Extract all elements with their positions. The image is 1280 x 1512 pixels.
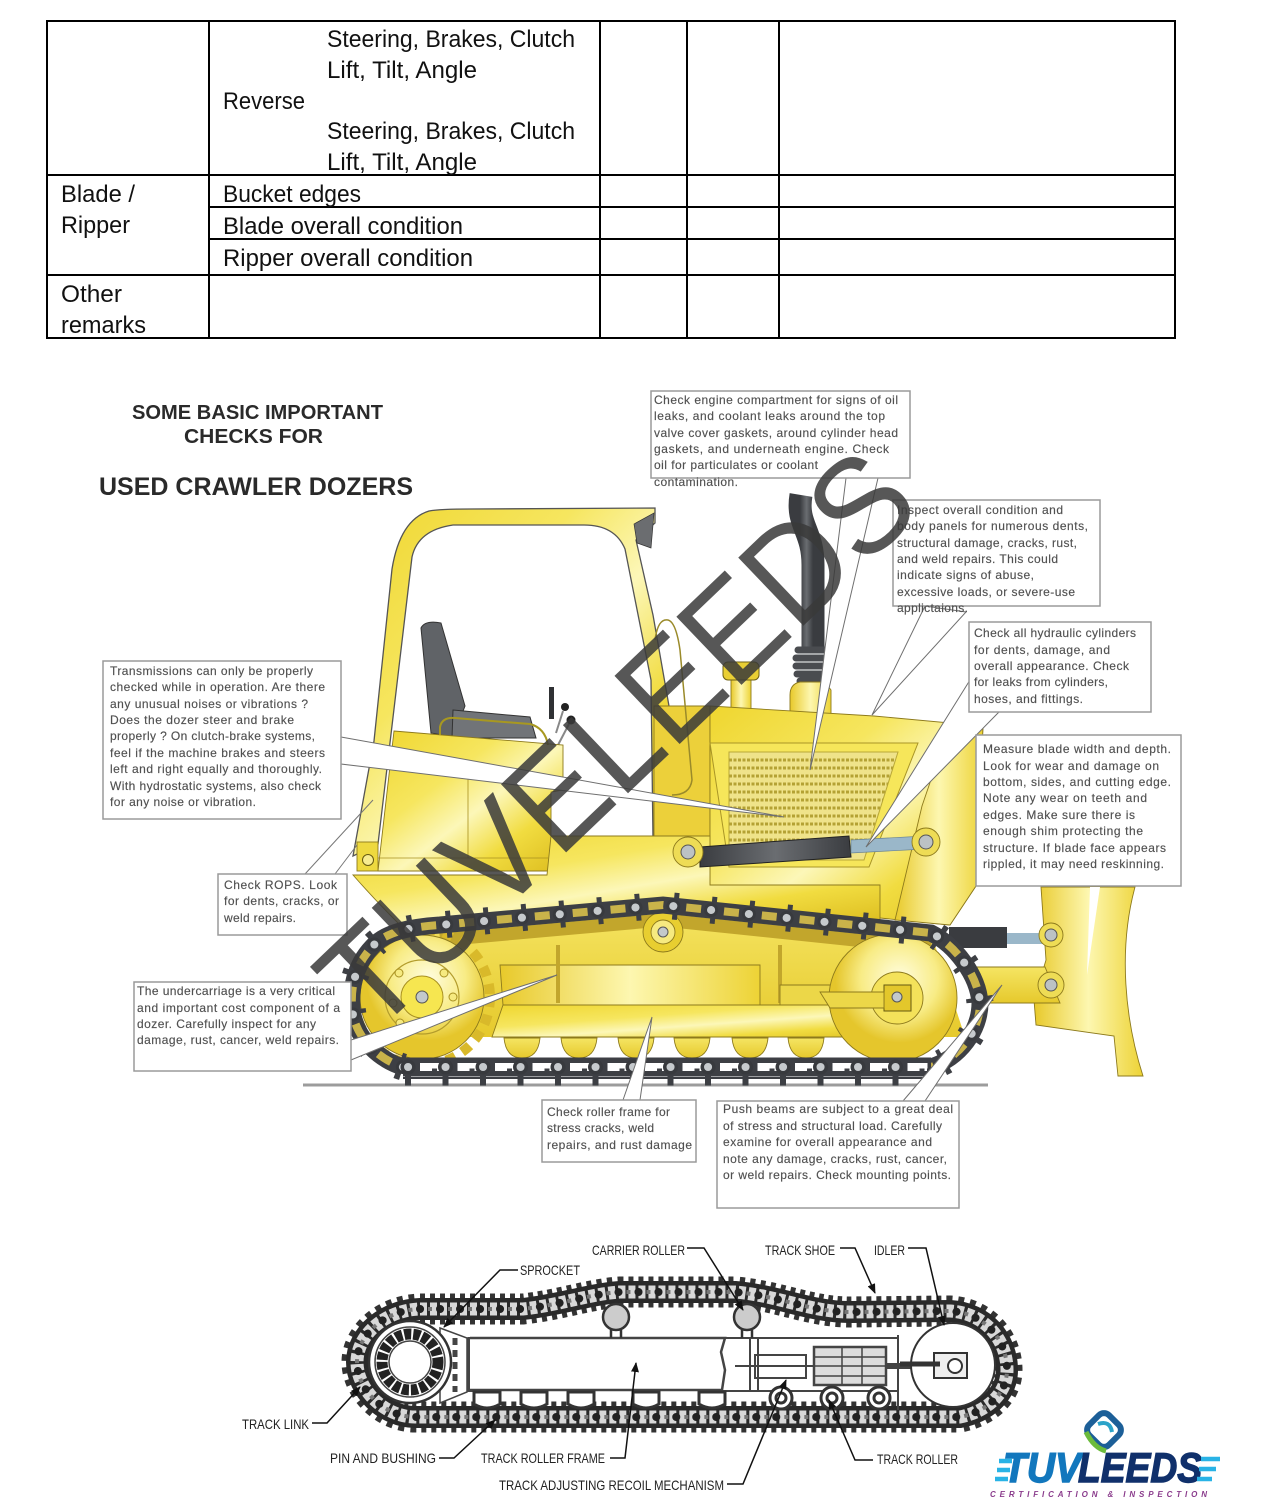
callout: ROPS: for dents, cracks, or [224, 894, 339, 908]
operator seat [421, 622, 536, 738]
filler cap [723, 662, 759, 712]
table text: Ripper [61, 212, 130, 239]
part labels: IDLER [874, 1242, 905, 1258]
callout: blade: rippled, it may need reskinning. [983, 857, 1164, 871]
callout: ROPS: Check ROPS. Look [224, 878, 338, 892]
cab console [378, 731, 563, 871]
callout: push beams: examine for overall appearance and [723, 1135, 932, 1149]
carrier rollers [603, 1304, 760, 1338]
callout: blade [976, 735, 1181, 886]
push arm and lift cylinder [949, 923, 1064, 1003]
engine post and handrail [654, 620, 710, 840]
callout: body panels: and weld repairs. This could [897, 552, 1058, 566]
radiator side panel [895, 726, 983, 925]
callout: body panels: indicate signs of abuse, [897, 568, 1034, 582]
callout: body panels [893, 500, 1100, 615]
callout: undercarriage: The undercarriage is a very critical [137, 984, 335, 998]
callout: transmission: properly ? On clutch-brake systems, [110, 729, 315, 743]
table text: Blade / [61, 181, 135, 208]
callout: blade: Look for wear and damage on [983, 759, 1159, 773]
carrier roller [643, 912, 683, 952]
engine grille [710, 743, 918, 867]
callout: transmission: left and right equally and thoroughly. [110, 762, 322, 776]
crawler track [352, 905, 980, 1081]
callout: undercarriage: and important cost component of a [137, 1001, 340, 1015]
callout: push beams: of stress and structural load. Carefully [723, 1119, 942, 1133]
bottom rollers [474, 1387, 890, 1409]
part labels: TRACK ADJUSTING RECOIL MECHANISM [499, 1477, 724, 1493]
table text: Other [61, 281, 122, 308]
rear corner pivot [357, 842, 378, 871]
table text: Lift, Tilt, Angle [327, 149, 477, 176]
callout: undercarriage: dozer. Carefully inspect for any [137, 1017, 316, 1031]
logo tagline: CERTIFICATION & INSPECTION [990, 1490, 1207, 1499]
callout: ROPS [218, 874, 347, 935]
sprocket wheel [369, 1321, 467, 1403]
title: some basic important checks: CHECKS FOR [184, 426, 324, 448]
callout: body panels: structural damage, cracks, rust, [897, 536, 1077, 550]
canopy bracket [634, 513, 654, 548]
callout: transmission: checked while in operation. Are there [110, 680, 325, 694]
seat rail [440, 718, 548, 745]
part labels: TRACK ROLLER [877, 1451, 958, 1467]
callout: hydraulic cylinders: for leaks from cylinders, [974, 675, 1108, 689]
callout: blade: Note any wear on teeth and [983, 791, 1147, 805]
callout: hydraulic cylinders: Check all hydraulic cylinders [974, 626, 1136, 640]
logo: TUV Leeds: LEEDS [1078, 1444, 1202, 1491]
part labels: TRACK LINK [242, 1416, 310, 1432]
callout: roller frame: repairs, and rust damage [547, 1138, 692, 1152]
callout: body panels: Inspect overall condition and [897, 503, 1063, 517]
roller frame [470, 1335, 934, 1410]
rear deck and lower body [353, 836, 880, 925]
part labels: PIN AND BUSHING [330, 1450, 436, 1466]
callout: body panels: excessive loads, or severe-use [897, 585, 1075, 599]
table text: remarks [61, 312, 146, 339]
callout: transmission: Transmissions can only be properly [110, 664, 313, 678]
callout: roller frame: stress cracks, weld [547, 1121, 654, 1135]
callout: blade: enough shim protecting the [983, 824, 1143, 838]
callout: engine compartment: oil for particulates or coolant [654, 458, 819, 472]
title: some basic important checks: USED CRAWLER DOZERS [99, 473, 413, 501]
callout: ROPS: weld repairs. [223, 911, 296, 925]
callout: transmission: With hydrostatic systems, also check [110, 779, 322, 793]
table text: Steering, Brakes, Clutch [327, 26, 575, 53]
callout: transmission [103, 661, 341, 819]
console door [378, 760, 548, 858]
logo: TUV Leeds [990, 1410, 1220, 1499]
ROPS frame [353, 508, 669, 856]
callout: push beams [717, 1101, 959, 1208]
table text: Reverse [223, 88, 305, 115]
exhaust stack [790, 495, 831, 714]
track diagram [242, 1242, 1007, 1493]
bottom track links [403, 1058, 931, 1076]
callout wedges [305, 478, 1002, 1101]
callout: transmission: Does the dozer steer and brake [110, 713, 294, 727]
callout: blade: Measure blade width and depth. [983, 742, 1171, 756]
callout: hydraulic cylinders: overall appearance. Check [974, 659, 1130, 673]
callout: engine compartment: Check engine compartment for signs of oil [654, 393, 898, 407]
sprocket [354, 929, 490, 1065]
callout: transmission: any unusual noises or vibrations ? [110, 697, 308, 711]
callout: engine compartment: leaks, and coolant leaks around the top [654, 409, 885, 423]
callout: transmission: for any noise or vibration. [110, 795, 256, 809]
callout: undercarriage: damage, rust, cancer, weld repairs. [137, 1033, 339, 1047]
part labels: CARRIER ROLLER [592, 1242, 685, 1258]
dozer illustration [303, 495, 1143, 1085]
undercarriage frame [400, 905, 965, 1037]
hood [710, 706, 983, 925]
callout: hydraulic cylinders: for dents, damage, and [974, 643, 1110, 657]
table grid [47, 21, 1175, 338]
table text: Bucket edges [223, 181, 361, 208]
callout: body panels: body panels for numerous dents, [897, 519, 1088, 533]
logo stripes [995, 1459, 1220, 1479]
title: some basic important checks: SOME BASIC IMPORTANT [132, 402, 383, 424]
table text: Blade overall condition [223, 213, 463, 240]
callout: push beams: Push beams are subject to a great deal [723, 1102, 953, 1116]
main hydraulic cylinder [673, 828, 940, 867]
inspection table [47, 21, 1175, 339]
callout: engine compartment [651, 391, 910, 489]
callout: engine compartment: contamination. [654, 475, 738, 489]
table text: Steering, Brakes, Clutch [327, 118, 575, 145]
table text: Ripper overall condition [223, 245, 473, 272]
part labels: TRACK ROLLER FRAME [481, 1450, 605, 1466]
logo wordmark: TUV [1003, 1444, 1084, 1491]
blade [1034, 887, 1143, 1076]
track chain [357, 1292, 1007, 1417]
ground line [303, 1084, 988, 1086]
callout: blade: structure. If blade face appears [983, 841, 1166, 855]
callout: transmission: feel if the machine brakes and steers [110, 746, 325, 760]
callout: engine compartment: valve cover gaskets, around cylinder head [654, 426, 898, 440]
track rollers [504, 1038, 824, 1058]
part labels [242, 1242, 958, 1493]
idler [900, 1323, 995, 1407]
callout: body panels: applictaions. [897, 601, 968, 615]
callout: hydraulic cylinders [969, 622, 1151, 712]
leader arrows [312, 1248, 944, 1484]
callout: undercarriage [134, 982, 351, 1071]
title: some basic important checks [99, 402, 413, 501]
watermark: TUVELEEDS [288, 421, 945, 1059]
table text: Lift, Tilt, Angle [327, 57, 477, 84]
callout: engine compartment: gaskets, and underneath engine. Check [654, 442, 890, 456]
idler wheel [820, 934, 957, 1062]
callout: hydraulic cylinders: hoses, and fittings. [974, 692, 1083, 706]
table text [61, 26, 575, 339]
control levers [549, 687, 576, 745]
callout: push beams: or weld repairs. Check mounting points. [723, 1168, 951, 1182]
part labels: TRACK SHOE [765, 1242, 835, 1258]
logo icon [1084, 1410, 1124, 1451]
callout: blade: bottom, sides, and cutting edge. [983, 775, 1171, 789]
callout: roller frame [542, 1100, 696, 1162]
callout: push beams: note any damage, cracks, rust, cancer, [723, 1152, 947, 1166]
callout: blade: edges. Make sure there is [983, 808, 1135, 822]
callout: roller frame: Check roller frame for [547, 1105, 670, 1119]
part labels: SPROCKET [520, 1262, 580, 1278]
